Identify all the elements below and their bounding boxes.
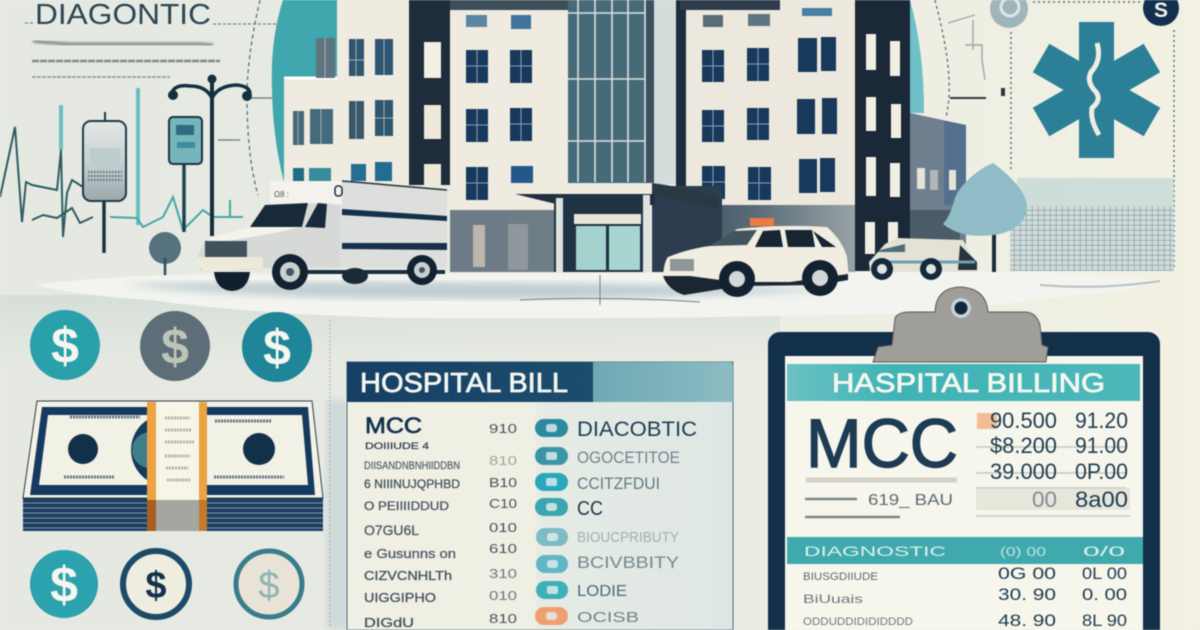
icon: teal coin <box>30 550 98 618</box>
bill categories: LODIE <box>577 583 627 600</box>
lower rows: BiUuais <box>803 592 863 606</box>
dollar coins: bottom row <box>30 550 302 618</box>
icon: iv pole with monitor <box>168 74 252 236</box>
icon: clipboard clip <box>873 287 1048 362</box>
bill line items: MCC <box>365 413 422 438</box>
bill amounts: 910 <box>489 421 517 436</box>
icon: grey coin <box>140 311 210 381</box>
amount rows: 91.20 <box>1075 408 1128 433</box>
right top sketch and star of life <box>935 0 1179 272</box>
billing sheet header: HASPITAL BILLING <box>832 368 1105 398</box>
bill line items: O7GU6L <box>364 522 419 538</box>
lower rows: 0G 00 <box>998 564 1056 583</box>
diagnostic band: (0) 00 <box>1000 544 1046 559</box>
amount rows: 8a00 <box>1075 487 1128 512</box>
icon: teal coin: $ <box>51 318 79 374</box>
bill amounts: 810 <box>489 611 517 626</box>
bill amounts: 810 <box>489 453 517 468</box>
clipboard paper <box>785 356 1143 630</box>
MCC details <box>805 480 957 517</box>
amount rows: 39.000 <box>990 459 1057 484</box>
bill amounts: 610 <box>489 541 517 556</box>
amount rows: $8.200 <box>990 433 1057 458</box>
amount rows: 90.500 <box>990 408 1057 433</box>
amount rows: 0P.00 <box>1075 459 1128 484</box>
dotted divider <box>329 320 331 628</box>
bill categories: CC <box>577 498 603 520</box>
icon: navy dollar coin <box>1143 0 1179 26</box>
lower rows: 48. 90 <box>998 611 1056 630</box>
lower rows: 0L 00 <box>1082 564 1127 583</box>
bill line items: CIZVCNHLTh <box>364 568 452 583</box>
bill line items: O PEIIIIDDUD <box>364 499 449 513</box>
bill amounts <box>489 421 517 626</box>
lower rows: 30. 90 <box>998 585 1056 604</box>
building: dark tower left <box>409 0 450 188</box>
icon: pale ring coin: $ <box>258 565 280 607</box>
white suv <box>663 218 849 297</box>
bill categories: OGOCETITOE <box>577 448 680 467</box>
building: side annex <box>910 0 966 271</box>
ambulance: wheels <box>214 254 437 291</box>
icon: navy ring coin <box>123 551 189 617</box>
small distant car <box>869 238 977 280</box>
lower rows: ODDUDDIDIDIDDDD <box>803 616 913 628</box>
bill line items: DOIIIUDE 4 <box>365 441 429 451</box>
icon: deep teal coin <box>242 312 312 382</box>
ambulance: cab <box>197 203 445 274</box>
icon: deep teal coin: $ <box>263 320 291 376</box>
ambulance: rear box: Ω8 : <box>274 190 289 199</box>
dollar coins: top row <box>30 310 312 382</box>
hospital bill header <box>347 362 733 402</box>
icon: teal coin <box>30 310 100 380</box>
bill categories: BIOUCPRIBUTY <box>577 529 679 546</box>
panel: hospital bill <box>347 362 733 630</box>
amount rows: 00 <box>1032 487 1057 512</box>
icon: teal coin: $ <box>50 557 78 613</box>
ambulance: rear box <box>270 181 447 268</box>
building: entrance canopy and doors <box>500 183 722 272</box>
bill category pills <box>535 419 568 625</box>
lower rows <box>803 564 1127 630</box>
bill line items: DIGdU <box>364 615 414 630</box>
lower rows: 8L 90 <box>1082 611 1127 630</box>
bill categories: BCIVBBITY <box>577 553 679 572</box>
icon: grey coin: $ <box>161 319 189 375</box>
bill amounts: 010 <box>489 588 517 603</box>
icon: stack of banknotes <box>23 401 323 531</box>
building: right block <box>676 0 855 272</box>
icon: iv bag <box>83 112 126 253</box>
hospital bill header: HOSPITAL BILL <box>360 367 568 398</box>
bill line items: 6 NIIINUJQPHBD <box>364 477 460 491</box>
icon: pale tree <box>943 163 1027 272</box>
bill categories <box>577 418 697 626</box>
panel: clipboard with hospital billing sheet <box>768 287 1160 630</box>
building: glass atrium <box>568 0 676 184</box>
amount rows: 91.00 <box>1075 433 1128 458</box>
bill categories: CCITZFDUI <box>577 474 660 493</box>
large MCC label: MCC <box>806 405 958 482</box>
building: dark tower right <box>855 0 910 271</box>
ecg heartbeat line <box>0 88 243 237</box>
bill amounts: 010 <box>489 520 517 535</box>
building: left wing <box>272 0 409 185</box>
bill line items: DIISANDNBNHIIDDBN <box>364 460 460 472</box>
top left diagnostic notes <box>25 0 276 195</box>
diagnostic band: DIAGNOSTIC <box>804 543 946 559</box>
bill amounts: 310 <box>489 566 517 581</box>
ambulance <box>197 181 447 291</box>
MCC details: 619_ BAU <box>868 492 953 509</box>
bill categories: DIACOBTIC <box>577 418 697 441</box>
icon: star of life <box>1033 22 1160 158</box>
diagnostic band: 0/0 <box>1083 543 1125 559</box>
icon: grey coin <box>990 0 1028 28</box>
hospital building <box>272 0 966 272</box>
icon: navy ring coin: $ <box>145 565 167 607</box>
building: centre block <box>450 0 570 272</box>
bill amounts: C10 <box>489 496 517 511</box>
lower rows: BIUSGDIIUDE <box>803 571 878 583</box>
bill line items: UIGGIPHO <box>364 590 436 605</box>
dotted frame <box>1011 2 1174 270</box>
icon: pale ring coin <box>236 551 302 617</box>
diagnostic band <box>787 537 1143 564</box>
lower rows: 0. 00 <box>1082 585 1127 604</box>
bill line items: e Gusunns on <box>364 546 456 561</box>
bill amounts: B10 <box>489 475 517 490</box>
amount rows <box>976 408 1130 516</box>
data grid sketch <box>1010 178 1174 271</box>
ground plaza <box>35 272 1160 318</box>
bill line items <box>364 413 460 630</box>
bill categories: OCISB <box>577 609 639 626</box>
icon: small tree <box>149 232 181 277</box>
billing sheet header <box>787 364 1140 401</box>
